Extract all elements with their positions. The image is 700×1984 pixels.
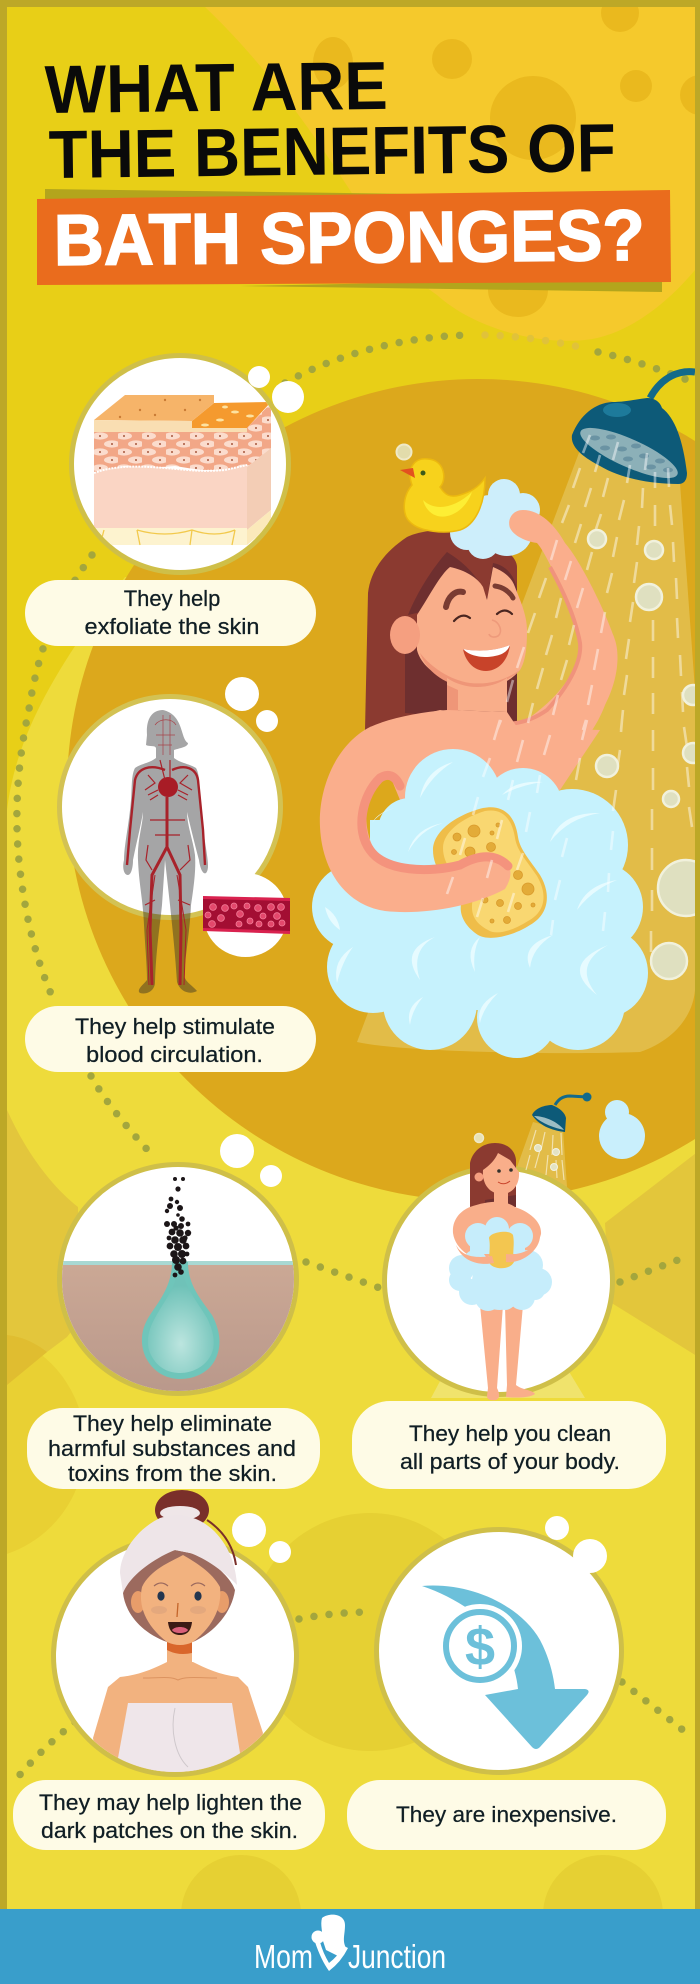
- circle: [54, 1538, 296, 1774]
- label text: blood circulation.: [86, 1042, 263, 1067]
- label text: They help stimulate: [75, 1014, 275, 1039]
- inset circle: [204, 873, 288, 957]
- panel: inexpensive: [347, 1516, 666, 1850]
- title line 2: THE BENEFITS OF: [48, 110, 616, 193]
- label pill: [352, 1401, 666, 1489]
- rubber duck: [400, 459, 485, 532]
- logo mark: [312, 1915, 348, 1971]
- back hair: [365, 530, 517, 730]
- torso: [370, 710, 600, 800]
- label pill: [13, 1780, 325, 1850]
- bubble above duck: [396, 444, 412, 460]
- mini water cone: [517, 1122, 567, 1187]
- label text: [84, 586, 260, 639]
- circle: [60, 1164, 296, 1394]
- panel: lighten patches: [13, 1490, 325, 1850]
- mini sponge: [489, 1232, 514, 1268]
- label text: dark patches on the skin.: [41, 1818, 298, 1843]
- foot glow: [431, 1370, 585, 1398]
- label text: harmful substances and: [48, 1436, 296, 1461]
- icon: blood vessel: [203, 896, 290, 934]
- circle: [60, 696, 280, 918]
- sponge: [433, 807, 547, 938]
- lower foam: [449, 1250, 552, 1311]
- label text: exfoliate the skin: [84, 614, 260, 639]
- panel: exfoliate: [25, 356, 316, 646]
- legs: [480, 1305, 535, 1400]
- icon: body with arteries: [123, 710, 208, 993]
- panel: blood circulation: [25, 677, 316, 1072]
- panel: clean body: [352, 1092, 666, 1489]
- foam cloud: [312, 749, 648, 1058]
- label text: They are inexpensive.: [396, 1802, 617, 1827]
- label text: toxins from the skin.: [68, 1461, 277, 1486]
- footer: [0, 1909, 700, 1984]
- logo text: Mom: [254, 1938, 313, 1975]
- bubbles: [248, 366, 304, 413]
- bubbles: [225, 677, 278, 732]
- label text: [39, 1790, 302, 1843]
- label text: all parts of your body.: [400, 1449, 620, 1474]
- face: [390, 552, 527, 716]
- label text: [75, 1014, 275, 1067]
- label text: They may help lighten the: [39, 1790, 302, 1815]
- circle: [384, 1168, 612, 1394]
- label pill: [25, 580, 316, 646]
- upper foam: [465, 1217, 533, 1254]
- water streaks: [447, 435, 692, 952]
- label pill: [25, 1006, 316, 1072]
- shower head: [572, 372, 695, 487]
- icon: down arrow: [422, 1586, 589, 1749]
- logo text: Junction: [348, 1938, 446, 1975]
- circle: [376, 1530, 622, 1772]
- label text: [48, 1411, 296, 1486]
- mini streaks and bubbles: [526, 1130, 564, 1180]
- icon: skin cross-section with pore: [62, 1261, 294, 1391]
- icon: skin layers block: [94, 395, 271, 545]
- mini shower head: [532, 1092, 592, 1132]
- panel: toxins: [27, 1134, 320, 1489]
- dotted connector lines: [12, 335, 695, 1784]
- label text: [400, 1421, 620, 1474]
- bubble: [474, 1134, 484, 1142]
- icon: dollar coin: $: [465, 1617, 495, 1677]
- left arm: [320, 727, 510, 912]
- bubbles: [232, 1513, 291, 1563]
- bubbles: [220, 1134, 282, 1187]
- forearms: [456, 1236, 540, 1264]
- icon: woman in towel: [93, 1490, 263, 1775]
- label text: They help eliminate: [73, 1411, 272, 1436]
- banner text: BATH SPONGES?: [53, 196, 645, 281]
- illustration: woman showering: [312, 372, 700, 1058]
- raised arm: [370, 510, 618, 730]
- foam on head: [450, 479, 540, 559]
- label text: They help you clean: [409, 1421, 611, 1446]
- orange banner: [37, 190, 671, 285]
- foam highlights: [325, 762, 617, 1025]
- label pill: [347, 1780, 666, 1850]
- title: [37, 48, 671, 292]
- title line 1: WHAT ARE: [44, 48, 388, 128]
- water cone: [357, 450, 695, 1053]
- bubbles: [545, 1516, 607, 1573]
- water bubbles: [588, 530, 700, 979]
- label pill: [27, 1408, 320, 1489]
- circle: skin: [72, 356, 288, 572]
- foam blob: [599, 1100, 645, 1159]
- icon: dollar coin: [438, 1604, 522, 1688]
- banner shadow: [45, 189, 662, 292]
- label text: They help: [124, 586, 220, 611]
- icon: mini woman: [449, 1143, 552, 1400]
- footer bar: [0, 1909, 700, 1984]
- icon: toxin particles: [164, 1177, 191, 1277]
